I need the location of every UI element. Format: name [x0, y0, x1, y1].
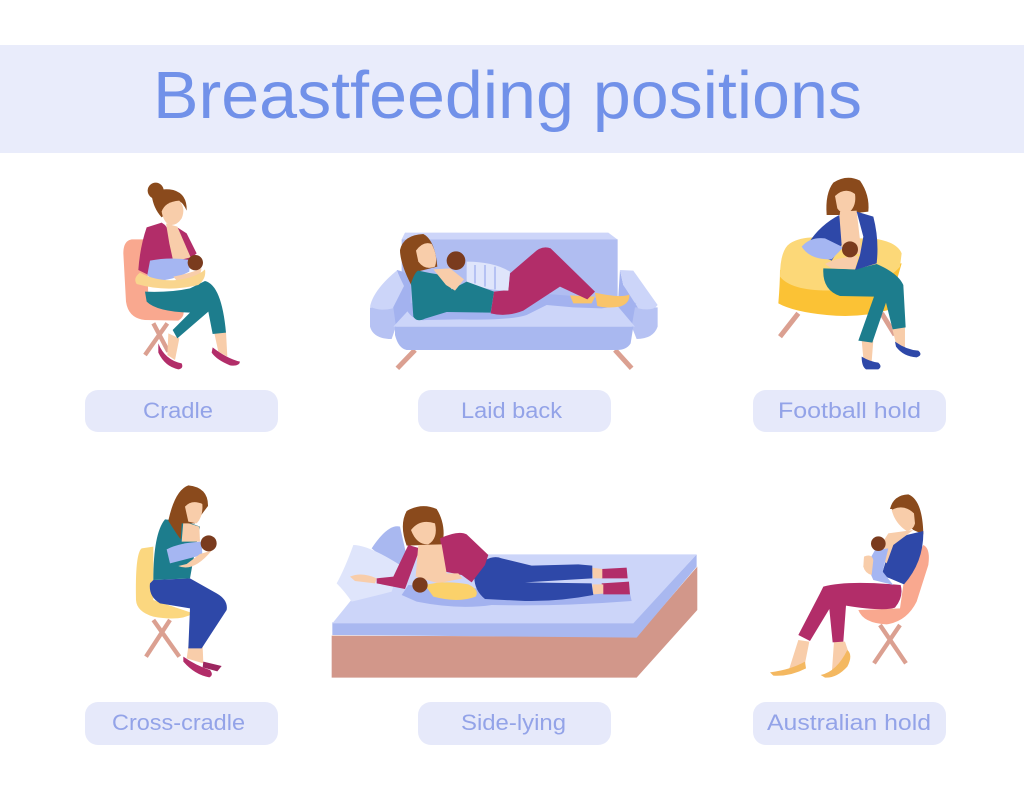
mother	[808, 178, 920, 369]
mother	[400, 234, 629, 320]
baby	[802, 238, 858, 269]
armchair	[778, 237, 902, 337]
baby	[412, 577, 477, 600]
label: Cradle	[85, 390, 278, 432]
baby	[863, 536, 893, 585]
nursing pillow	[135, 269, 205, 289]
title banner: Breastfeeding positions	[153, 58, 862, 133]
label: Side-lying	[418, 702, 611, 745]
blanket shadow	[402, 585, 632, 607]
mother	[770, 494, 923, 678]
mother	[150, 485, 227, 677]
baby head	[447, 251, 465, 270]
bed	[332, 554, 697, 678]
illustration: cross-cradle position	[136, 485, 227, 677]
label: Side-lying: Side-lying	[461, 710, 566, 735]
label: Cross-cradle: Cross-cradle	[112, 710, 245, 735]
label: Australian hold: Australian hold	[767, 710, 931, 735]
label: Football hold: Football hold	[778, 398, 921, 423]
title banner	[0, 45, 1024, 153]
illustration: side-lying position	[332, 506, 697, 678]
label: Football hold	[753, 390, 946, 432]
illustration: Australian hold position	[770, 494, 929, 678]
label: Australian hold	[753, 702, 946, 745]
chair	[136, 547, 193, 657]
pillows	[337, 526, 408, 602]
mother	[138, 183, 240, 369]
label: Laid back	[418, 390, 611, 432]
illustration: laid back position	[370, 233, 658, 368]
illustration: football hold position	[778, 178, 920, 369]
sofa	[370, 233, 658, 368]
chair	[858, 545, 929, 663]
mother	[350, 506, 630, 601]
label: Laid back: Laid back	[461, 398, 563, 423]
baby	[147, 255, 203, 281]
chair	[123, 239, 184, 355]
label: Cross-cradle	[85, 702, 278, 745]
label: Cradle: Cradle	[143, 398, 213, 423]
baby	[167, 535, 217, 568]
illustration: cradle position	[123, 183, 240, 369]
